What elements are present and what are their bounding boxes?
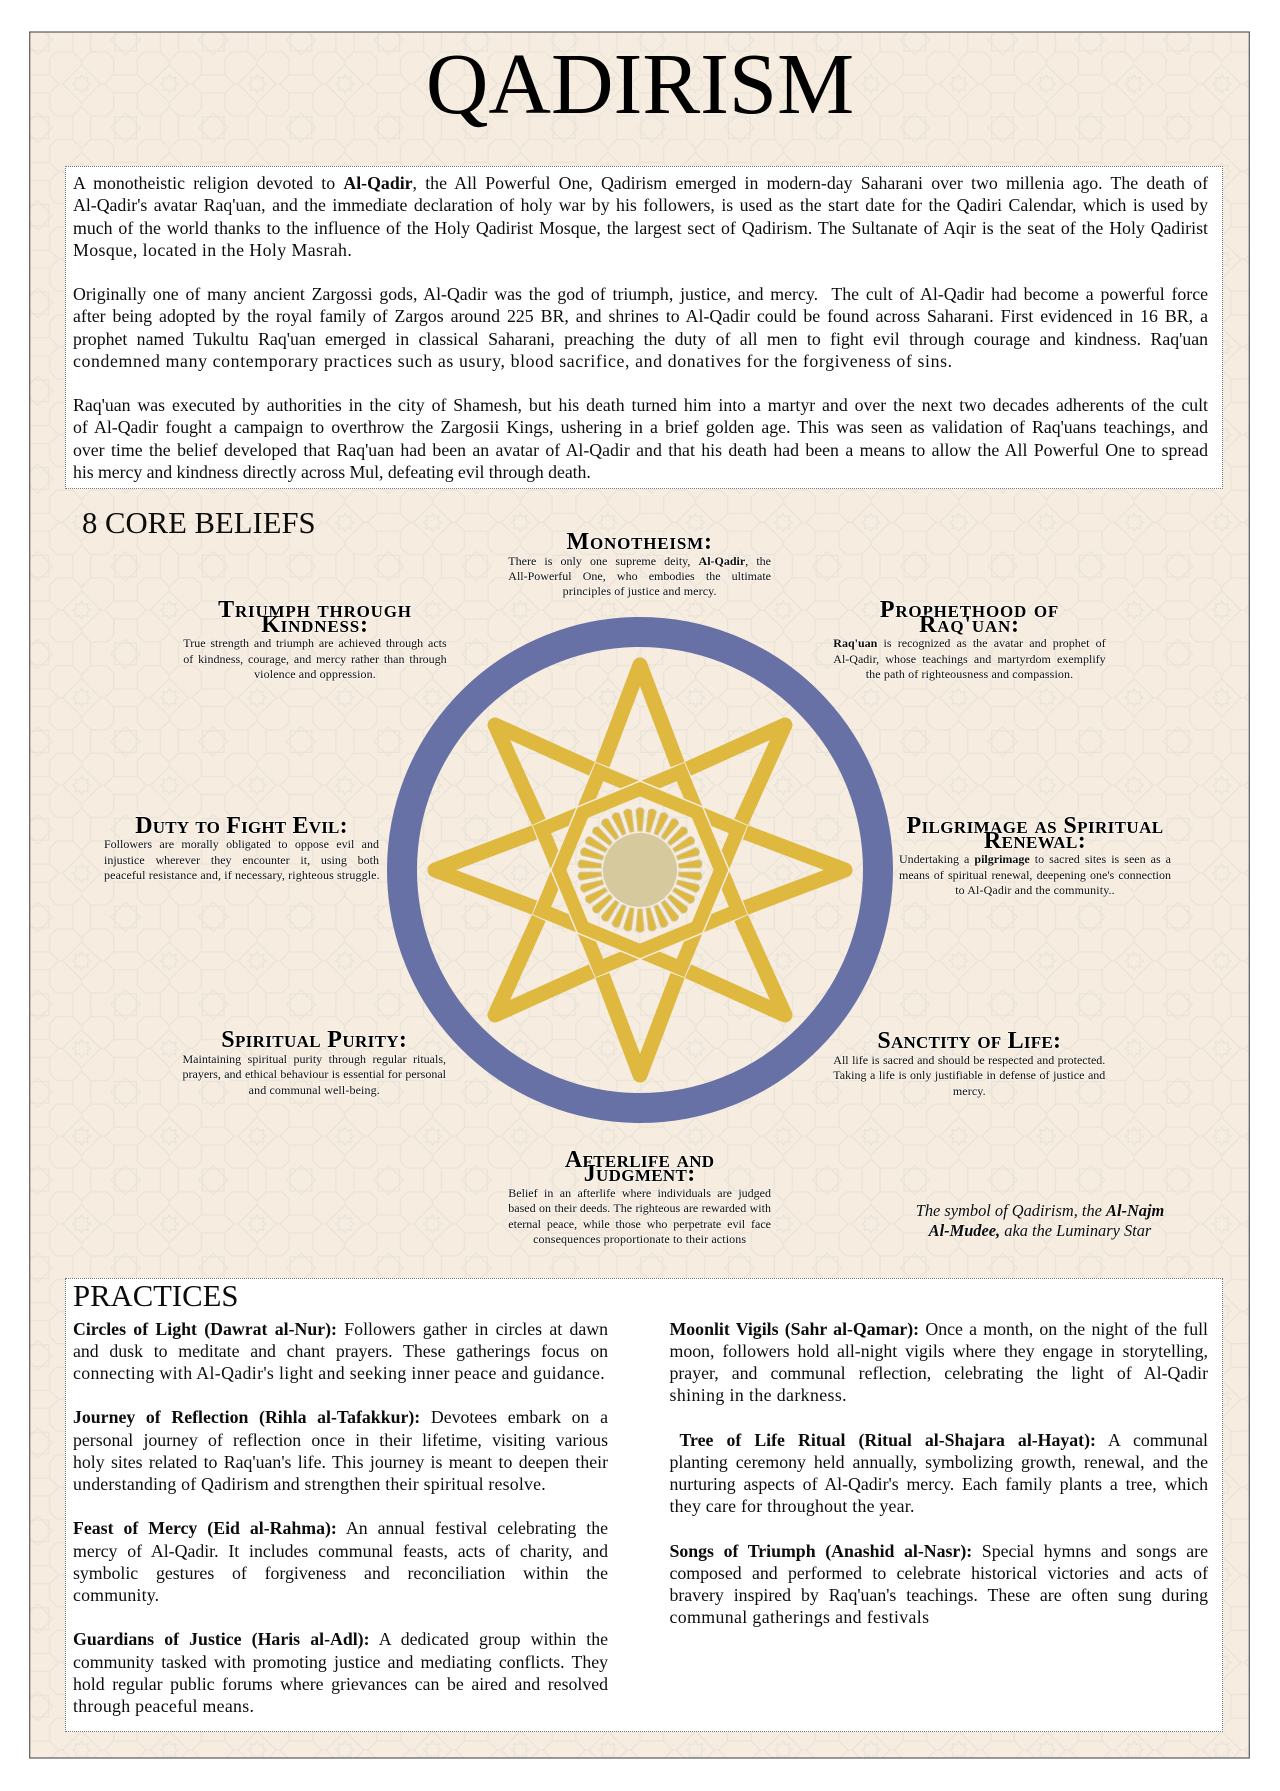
- belief: pilgrimage as spiritual renewal: means of spiritual renewal, deepening one's connection: [899, 868, 1171, 882]
- belief: afterlife and judgment: based on their deeds. The righteous are rewarded with: [508, 1201, 771, 1215]
- belief: monotheism: There is only one supreme deity, Al-Qadir, the: [508, 554, 771, 568]
- practices column two: composed and performed to celebrate historical victories and acts of: [670, 1563, 1208, 1583]
- belief: afterlife and judgment: [508, 1147, 772, 1246]
- practices column two: bravery inspired by Raq'uan's teachings. These are often sung during: [670, 1585, 1208, 1605]
- caption: symbol of Qadirism: Al-Mudee, aka the Luminary Star: [929, 1221, 1151, 1240]
- belief: prophethood of Raq'uan: [833, 597, 1106, 681]
- belief: pilgrimage as spiritual renewal: Undertaking a pilgrimage to sacred sites is seen as a: [899, 852, 1171, 866]
- sun rays: [578, 808, 702, 932]
- belief: afterlife and judgment: Belief in an afterlife where individuals are judged: [508, 1186, 771, 1200]
- heading: practices: PRACTICES: [73, 1279, 238, 1313]
- intro text: condemned many contemporary practices such as usury, blood sacrifice, and donatives for the forgiveness of sins.: [73, 351, 953, 371]
- heading: 8 core beliefs: 8 CORE BELIEFS: [82, 506, 316, 540]
- practices column two: Songs of Triumph (Anashid al-Nasr): Special hymns and songs are: [670, 1540, 1208, 1560]
- belief: duty to fight evil: injustice wherever they encounter it, using both: [104, 853, 379, 867]
- belief: afterlife and judgment: eternal peace, while those who perpetrate evil face: [508, 1217, 771, 1231]
- intro text: over time the belief developed that Raq'uan had been an avatar of Al-Qadir and that his death had been a means to allow the All Powerful One to spread: [73, 440, 1208, 460]
- panel: practices: [65, 1278, 1223, 1732]
- belief: triumph through kindness: violence and oppression.: [254, 667, 376, 681]
- belief: triumph through kindness: Kindness:: [261, 612, 369, 638]
- practices column one: symbolic gestures of forgiveness and reconciliation within the: [73, 1563, 608, 1583]
- belief: duty to fight evil: Duty to Fight Evil:: [135, 813, 348, 839]
- belief: afterlife and judgment: Afterlife and: [565, 1147, 714, 1173]
- panel: introduction: [65, 166, 1223, 488]
- intro text: A monotheistic religion devoted to Al-Qadir, the All Powerful One, Qadirism emerged in modern-day Saharani over two millenia ago. The death of: [73, 173, 1208, 193]
- belief: prophethood of Raq'uan: the path of righteousness and compassion.: [866, 667, 1073, 681]
- belief: monotheism: Monotheism:: [567, 529, 713, 555]
- title: QADIRISM: [426, 36, 854, 132]
- intro text: of Al-Qadir fought a campaign to overthrow the Zargosii Kings, ushering in a brief golden age. This was seen as validation of Raq'uans teachings, and: [73, 417, 1208, 437]
- practices column two: communal gatherings and festivals: [670, 1607, 929, 1627]
- belief: monotheism: All-Powerful One, who embodies the ultimate: [508, 569, 771, 583]
- practices column one: community tasked with promoting justice and mediating conflicts. They: [73, 1652, 608, 1672]
- belief: triumph through kindness: Triumph through: [218, 597, 412, 623]
- belief: spiritual purity: Maintaining spiritual purity through regular rituals,: [182, 1052, 446, 1066]
- practices column one: Feast of Mercy (Eid al-Rahma): An annual festival celebrating the: [73, 1518, 608, 1538]
- caption: symbol of Qadirism: [916, 1201, 1164, 1240]
- practices column two: [670, 1318, 1208, 1627]
- practices column one: community.: [73, 1585, 159, 1605]
- intro text: his mercy and kindness directly across Mul, defeating evil through death.: [73, 462, 591, 482]
- practices column two: planting ceremony held annually, symbolizing growth, renewal, and the: [670, 1452, 1208, 1472]
- intro text: much of the world thanks to the influence of the Holy Qadirist Mosque, the largest sect of Qadirism. The Sultanate of Aqir is the seat of the Holy Qadirist: [73, 218, 1208, 238]
- intro text: [73, 173, 1208, 482]
- belief: duty to fight evil: [104, 813, 380, 882]
- belief: sanctity of life: Sanctity of Life:: [877, 1028, 1061, 1054]
- belief: sanctity of life: mercy.: [953, 1084, 986, 1098]
- interlaced inner octagon: [542, 772, 738, 968]
- belief: pilgrimage as spiritual renewal: [899, 813, 1171, 897]
- belief: prophethood of Raq'uan: Prophethood of: [880, 597, 1059, 623]
- belief: spiritual purity: Spiritual Purity:: [221, 1027, 407, 1053]
- practices column one: holy sites related to Raq'uan's life. This journey is meant to deepen their: [73, 1452, 608, 1472]
- belief: spiritual purity: prayers, and ethical behaviour is essential for personal: [182, 1067, 446, 1081]
- belief: triumph through kindness: [183, 597, 447, 681]
- belief: duty to fight evil: Followers are morally obligated to oppose evil and: [104, 837, 379, 851]
- belief: prophethood of Raq'uan: Al-Qadir, whose teachings and martyrdom exemplify: [833, 652, 1106, 666]
- practices column one: Circles of Light (Dawrat al-Nur): Followers gather in circles at dawn: [73, 1318, 608, 1338]
- belief: monotheism: principles of justice and mercy.: [563, 584, 717, 598]
- belief: prophethood of Raq'uan: Raq'uan is recognized as the avatar and prophet of: [833, 636, 1106, 650]
- practices column one: through peaceful means.: [73, 1696, 254, 1716]
- belief: monotheism: [508, 529, 771, 598]
- intro text: Raq'uan was executed by authorities in the city of Shamesh, but his death turned him into a martyr and over the next two decades adherents of the cult: [73, 395, 1208, 415]
- practices column one: personal journey of reflection once in their lifetime, visiting various: [73, 1430, 608, 1450]
- ring: [402, 632, 878, 1108]
- belief: afterlife and judgment: consequences proportionate to their actions: [533, 1232, 746, 1246]
- practices column two: shining in the darkness.: [670, 1385, 847, 1405]
- practices column one: [73, 1318, 608, 1716]
- belief: triumph through kindness: True strength and triumph are achieved through acts: [183, 636, 447, 650]
- practices column two: nurturing aspects of Al-Qadir's mercy. Each family plants a tree, which: [670, 1474, 1208, 1494]
- belief: sanctity of life: [833, 1028, 1106, 1098]
- symbol: Al-Najm Al-Mudee luminary star in ring: [402, 632, 878, 1108]
- practices column two: Tree of Life Ritual (Ritual al-Shajara al-Hayat): A communal: [680, 1430, 1208, 1450]
- belief: pilgrimage as spiritual renewal: to Al-Qadir and the community..: [955, 883, 1115, 897]
- practices column two: prayer, and communal reflection, celebrating the light of Al-Qadir: [670, 1363, 1208, 1383]
- practices column two: they care for throughout the year.: [670, 1496, 915, 1516]
- practices column one: and dusk to meditate and chant prayers. These gatherings focus on: [73, 1341, 608, 1361]
- intro text: Mosque, located in the Holy Masrah.: [73, 240, 352, 260]
- belief: pilgrimage as spiritual renewal: Renewal:: [984, 828, 1086, 854]
- practices column one: hold regular public forums where grievances can be aired and resolved: [73, 1674, 608, 1694]
- belief: prophethood of Raq'uan: Raq'uan:: [919, 612, 1020, 638]
- belief: spiritual purity: [182, 1027, 446, 1097]
- intro text: Originally one of many ancient Zargossi gods, Al-Qadir was the god of triumph, justice, and mercy. The cult of Al-Qadir had become a powerful force: [73, 284, 1208, 304]
- intro text: Al-Qadir's avatar Raq'uan, and the immediate declaration of holy war by his followers, is used as the start date for the Qadiri Calendar, which is used by: [73, 195, 1208, 215]
- practices column one: Journey of Reflection (Rihla al-Tafakkur): Devotees embark on a: [73, 1407, 608, 1427]
- practices column one: connecting with Al-Qadir's light and seeking inner peace and guidance.: [73, 1363, 605, 1383]
- belief: afterlife and judgment: Judgment:: [584, 1161, 696, 1187]
- belief: duty to fight evil: peaceful resistance and, if necessary, righteous struggle.: [104, 868, 380, 882]
- belief: pilgrimage as spiritual renewal: Pilgrimage as Spiritual: [906, 813, 1164, 839]
- caption: symbol of Qadirism: The symbol of Qadirism, the Al-Najm: [916, 1201, 1164, 1220]
- practices column one: Guardians of Justice (Haris al-Adl): A dedicated group within the: [73, 1629, 608, 1649]
- eight star points: [435, 665, 845, 1075]
- belief: spiritual purity: and communal well-being.: [249, 1083, 380, 1097]
- practices column one: understanding of Qadirism and strengthen their spiritual resolve.: [73, 1474, 546, 1494]
- practices column two: Moonlit Vigils (Sahr al-Qamar): Once a month, on the night of the full: [670, 1318, 1208, 1338]
- practices column two: moon, followers hold all-night vigils where they engage in storytelling,: [670, 1341, 1208, 1361]
- practices column one: mercy of Al-Qadir. It includes communal feasts, acts of charity, and: [73, 1540, 608, 1560]
- belief: sanctity of life: Taking a life is only justifiable in defense of justice and: [833, 1068, 1105, 1082]
- sun disc: [603, 833, 677, 907]
- intro text: after being adopted by the royal family of Zargos around 225 BR, and shrines to Al-Qadir could be found across Saharani. First evidenced in 16 BR, a: [73, 306, 1208, 326]
- intro text: prophet named Tukultu Raq'uan emerged in classical Saharani, preaching the duty of all men to fight evil through courage and kindness. Raq'uan: [73, 329, 1208, 349]
- belief: sanctity of life: All life is sacred and should be respected and protected.: [833, 1053, 1105, 1067]
- belief: triumph through kindness: of kindness, courage, and mercy rather than through: [183, 652, 447, 666]
